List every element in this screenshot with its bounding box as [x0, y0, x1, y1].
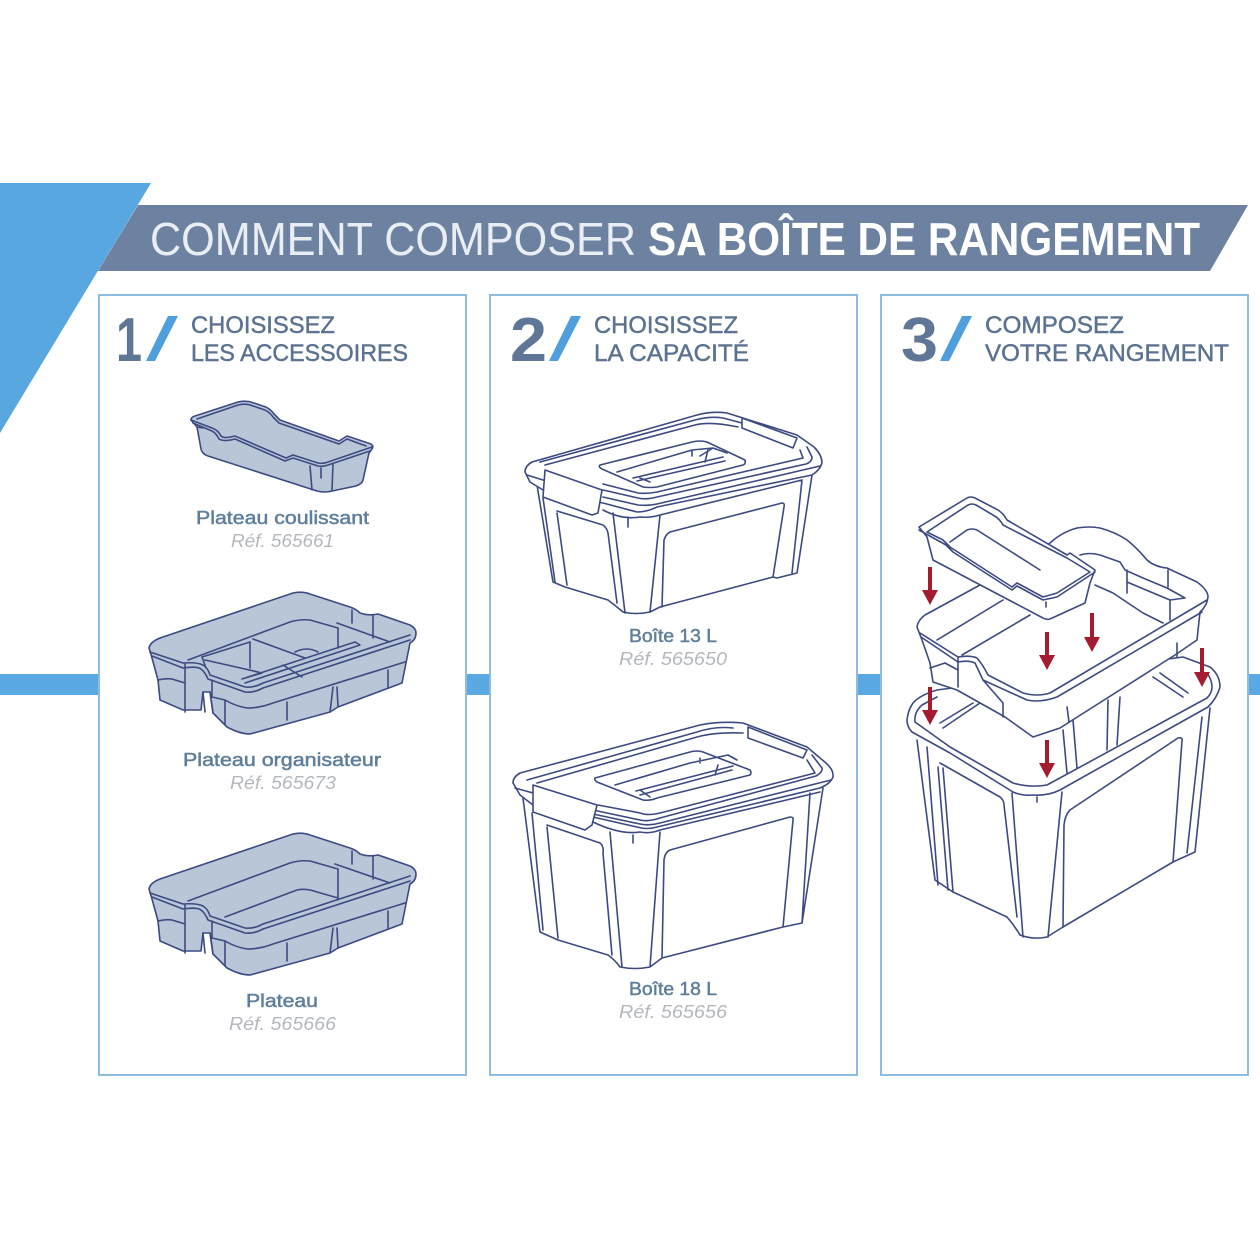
arrow 6	[1039, 740, 1055, 778]
label: plateau: Plateau	[246, 991, 318, 1011]
label: boite 13 L: Réf. 565650	[619, 649, 727, 669]
arrow 4	[1194, 648, 1210, 687]
icon: box 13 L	[525, 412, 822, 614]
label: boite 18 L: Boîte 18 L	[629, 979, 717, 999]
label: plateau coulissant: Réf. 565661	[231, 531, 334, 551]
panel: step 2 capacity	[490, 295, 857, 1075]
step 1 heading: 1	[116, 306, 142, 375]
label: boite 18 L	[619, 979, 728, 1022]
title banner: SA BOÎTE DE RANGEMENT	[648, 213, 1200, 265]
label: plateau coulissant	[196, 508, 369, 551]
label: boite 13 L: Boîte 13 L	[629, 626, 717, 646]
icon: organiser tray	[149, 592, 416, 734]
step 1 heading: CHOISISSEZ	[191, 312, 335, 339]
step 3 heading: VOTRE RANGEMENT	[985, 340, 1229, 367]
icon: box 18 L	[513, 722, 833, 968]
title banner: COMMENT COMPOSER	[150, 213, 636, 265]
title banner	[0, 183, 1248, 433]
step 3 heading	[901, 306, 1229, 375]
arrow 1	[922, 567, 938, 605]
step 2 heading: 2	[510, 306, 547, 375]
icon: stacked assembly	[907, 497, 1220, 938]
label: plateau: Réf. 565666	[229, 1014, 337, 1034]
step 2 heading: CHOISISSEZ	[594, 312, 738, 339]
label: plateau coulissant: Plateau coulissant	[196, 508, 369, 528]
small tray on top	[919, 497, 1095, 619]
icon: sliding tray	[191, 401, 373, 492]
step 1 heading: LES ACCESSOIRES	[191, 340, 408, 367]
horizontal blue band	[0, 674, 1260, 695]
label: plateau organisateur	[183, 750, 381, 793]
bottom box	[907, 657, 1220, 938]
label: plateau organisateur: Réf. 565673	[230, 773, 336, 793]
step 1 heading	[116, 306, 408, 375]
label: plateau	[229, 991, 337, 1034]
label: boite 18 L: Réf. 565656	[619, 1002, 728, 1022]
step 2 heading	[510, 306, 749, 375]
arrow 5	[922, 687, 938, 725]
arrow 3	[1084, 613, 1100, 652]
label: boite 13 L	[619, 626, 727, 669]
arrows	[922, 567, 1210, 778]
panel: step 3 compose	[881, 295, 1248, 1075]
step 3 heading: COMPOSEZ	[985, 312, 1124, 339]
icon: plain tray	[149, 833, 416, 975]
panel: step 1 accessories	[99, 295, 466, 1075]
middle tray	[917, 527, 1208, 737]
step 3 heading: 3	[901, 306, 938, 375]
arrow 2	[1039, 632, 1055, 670]
label: plateau organisateur: Plateau organisateur	[183, 750, 381, 770]
step 2 heading: LA CAPACITÉ	[594, 340, 749, 367]
